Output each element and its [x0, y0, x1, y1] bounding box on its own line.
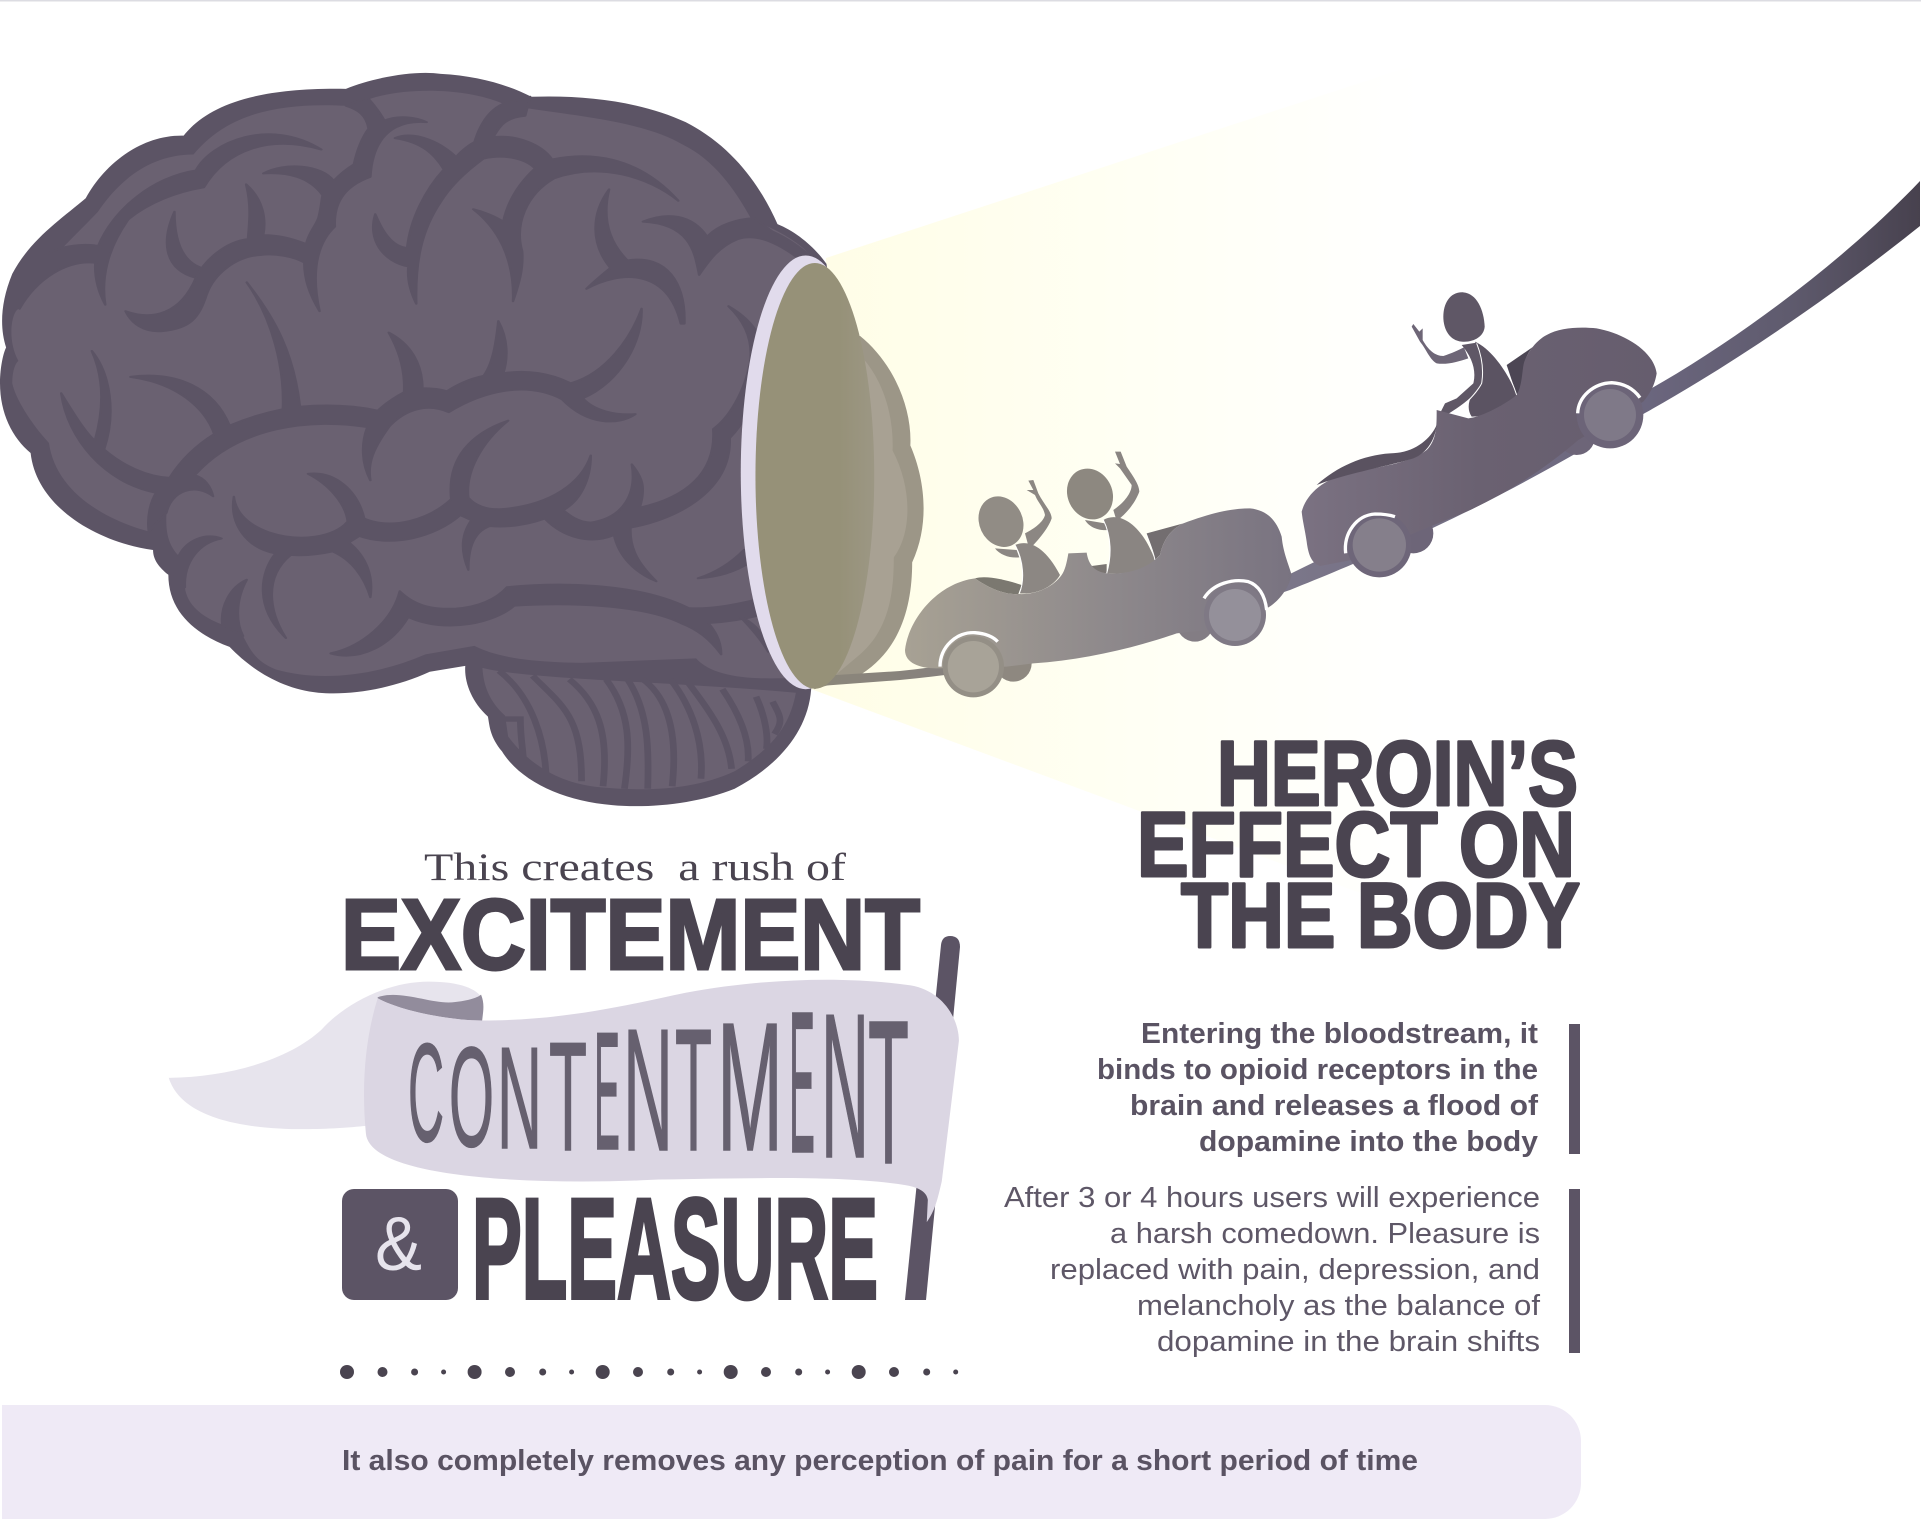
- word: contentment: N: [821, 971, 869, 1201]
- ampersand box: [342, 1189, 458, 1300]
- word: contentment: N: [497, 1017, 542, 1179]
- bottom callout: [2, 1405, 1581, 1519]
- brain opening rim: [741, 255, 871, 689]
- title: HEROIN’S: [1217, 723, 1578, 825]
- brain front lobes seen through light: [814, 336, 924, 689]
- rider one: [970, 480, 1060, 594]
- text block: comedown: replaced with pain, depression, and: [1050, 1254, 1540, 1286]
- brain opening: [755, 263, 874, 689]
- text: T: [868, 978, 909, 1207]
- text block: comedown: [1004, 1182, 1541, 1358]
- text block: bloodstream: [1097, 1018, 1538, 1158]
- text block: bloodstream: binds to opioid receptors in the: [1097, 1054, 1538, 1086]
- roller coaster track: [820, 181, 1920, 686]
- title: [1137, 723, 1580, 967]
- brain outer silhouette: [0, 73, 857, 806]
- word: contentment: M: [717, 984, 783, 1189]
- banner: [169, 980, 959, 1222]
- text block: comedown: a harsh comedown. Pleasure is: [1110, 1218, 1540, 1250]
- title: THE BODY: [1181, 865, 1580, 967]
- cerebellum: [482, 668, 796, 789]
- brain sulci folds: [17, 97, 814, 656]
- text block: bloodstream: dopamine into the body: [1199, 1126, 1538, 1158]
- bar beside bloodstream text: [1569, 1024, 1580, 1154]
- bar beside comedown text: [1569, 1189, 1580, 1353]
- word: contentment: E: [594, 997, 620, 1185]
- ampersand box: &: [375, 1202, 422, 1287]
- text block: comedown: dopamine in the brain shifts: [1157, 1326, 1540, 1358]
- intro line: This creates a rush of: [424, 846, 846, 889]
- car with two riders: [905, 452, 1292, 697]
- brain lighter cortex: [11, 91, 814, 678]
- banner pole: [905, 936, 960, 1300]
- word: contentment: O: [449, 1018, 494, 1177]
- word: contentment: E: [789, 969, 815, 1195]
- brain illustration: [0, 73, 874, 806]
- title: EFFECT ON: [1137, 794, 1575, 896]
- text block: comedown: melancholy as the balance of: [1137, 1290, 1541, 1322]
- word: excitement: EXCITEMENT: [341, 879, 920, 991]
- car with one rider: [1302, 292, 1657, 577]
- rider two: [1059, 452, 1155, 574]
- bottom callout: It also completely removes any perception of pain for a short period of time: [342, 1445, 1418, 1477]
- text block: comedown: After 3 or 4 hours users will experience: [1004, 1182, 1540, 1214]
- text block: bloodstream: Entering the bloodstream, it: [1141, 1018, 1538, 1050]
- dotted divider: [340, 1365, 958, 1379]
- rider: [1412, 292, 1517, 417]
- word: contentment: [408, 969, 909, 1207]
- top border line: [0, 0, 1921, 2]
- word: pleasure: PLEASURE: [472, 1170, 878, 1329]
- word: contentment: C: [408, 1014, 444, 1171]
- text block: bloodstream: brain and releases a flood of: [1130, 1090, 1538, 1122]
- light beam: [811, 37, 1500, 945]
- word: contentment: T: [549, 1010, 587, 1183]
- word: contentment: N: [623, 992, 673, 1187]
- word: contentment: T: [675, 992, 712, 1187]
